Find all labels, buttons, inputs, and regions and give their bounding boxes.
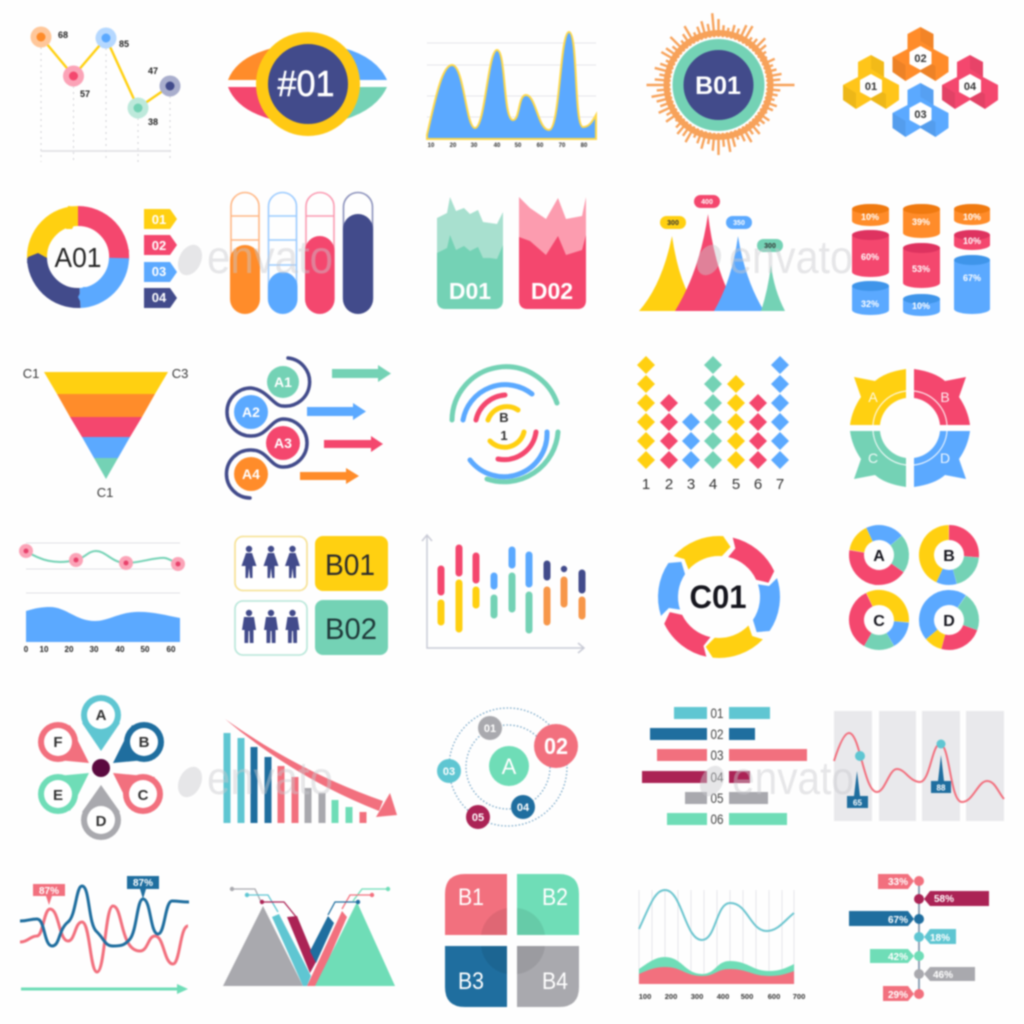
panel: area chart with peaks: 30 (471, 143, 478, 149)
panel: percentage tag timeline: 33% (888, 877, 908, 888)
panel: sunburst badge B01 (646, 13, 794, 155)
panel: peak chart: 400 (701, 199, 713, 206)
panel: six pin flower: E (53, 787, 63, 804)
panel: four tiles B1-B4: B4 (542, 968, 568, 995)
panel: area card D02: D02 (531, 278, 573, 304)
panel: four donuts A B C D: C (873, 613, 885, 630)
panel: butterfly bars 01-06: 02 (710, 726, 724, 742)
panel: line chart with dots: 38 (148, 117, 158, 127)
panel: funnel: C1 (23, 366, 39, 381)
panel: hexagon clusters 01-04: 04 (964, 81, 977, 93)
panel: line and stacked area chart: 100 (639, 992, 651, 1001)
panel: butterfly bars 01-06: 05 (710, 790, 724, 806)
panel: donut A01 with tags: 03 (152, 264, 166, 279)
panel: four part ring A B C D (850, 369, 970, 487)
panel: A1-A4 snake steps with arrows: A1 (274, 374, 292, 390)
panel: diamond column chart: 4 (709, 476, 717, 493)
panel: hexagon clusters 01-04: 01 (865, 81, 877, 93)
panel: area chart with peaks: 40 (494, 143, 501, 149)
panel: two line wave chart (20, 876, 189, 994)
panel: area card D02 (519, 197, 586, 309)
panel: percentage tag timeline: 42% (888, 952, 908, 963)
panel: butterfly bars 01-06: 04 (710, 769, 724, 785)
panel: curve over grey columns: 88 (937, 784, 946, 792)
watermark: envato row 5 left: envato (207, 752, 333, 804)
panel: cylinder stacks (852, 204, 990, 316)
panel: wave and area chart: 50 (141, 645, 150, 654)
panel: wave and area chart: 60 (167, 645, 176, 654)
panel: area chart with peaks: 70 (559, 143, 566, 149)
panel: overlapping mountains V (223, 887, 395, 986)
panel: area card D01 (437, 197, 503, 309)
panel: four donuts A B C D: D (943, 613, 955, 630)
panel: peak chart: 350 (733, 220, 745, 227)
panel: wave and area chart: 40 (116, 645, 125, 654)
panel: two line wave chart: 87% (133, 878, 153, 889)
panel: falling bars with arrow (224, 719, 397, 823)
panel: four donuts A B C D (847, 523, 981, 652)
panel: wave and area chart: 0 (24, 645, 29, 654)
panel: four part ring A B C D: A (868, 389, 878, 405)
panel: orbit diagram A: 02 (544, 733, 568, 759)
panel: six pin flower (38, 695, 164, 840)
panel: range bar chart (422, 535, 584, 653)
panel: people boxes B01 B02 (235, 536, 388, 655)
panel: four tiles B1-B4 (445, 874, 579, 1007)
panel: line chart with dots: 57 (80, 89, 90, 99)
panel: peak chart: 300 (667, 220, 679, 227)
panel: six pin flower: A (96, 707, 107, 724)
panel: line chart with dots: 68 (58, 30, 68, 40)
panel: donut A01 with tags: 02 (152, 238, 166, 253)
panel: four donuts A B C D: B (943, 548, 955, 565)
panel: diamond column chart: 3 (687, 476, 695, 493)
panel: area chart with peaks (427, 32, 596, 149)
panel: cylinder stacks: 10% (861, 212, 879, 222)
panel: donut A01 with tags: 01 (152, 212, 166, 227)
panel: six pin flower: F (53, 734, 63, 751)
panel: A1-A4 snake steps with arrows (226, 358, 391, 498)
panel: circular arrows C01: C01 (690, 579, 746, 615)
panel: concentric arcs B1: B (499, 410, 509, 425)
panel: donut A01 with tags: A01 (54, 242, 102, 273)
panel: four tiles B1-B4: B2 (542, 884, 568, 911)
panel: wave and area chart: 20 (65, 645, 74, 654)
panel: orbit diagram A: A (502, 754, 517, 779)
panel: area chart with peaks: 80 (581, 143, 588, 149)
panel: circular arrows C01 (646, 521, 792, 674)
panel: peak chart: 300 (764, 243, 776, 250)
panel: percentage tag timeline: 58% (934, 894, 954, 905)
panel: orbit diagram A: 01 (484, 723, 496, 735)
panel: line and stacked area chart: 600 (768, 992, 780, 1001)
panel: six pin flower: D (96, 813, 107, 830)
panel: butterfly bars 01-06: 01 (710, 705, 724, 721)
panel: cylinder stacks: 10% (912, 301, 930, 311)
panel: cylinder stacks: 10% (963, 236, 981, 246)
panel: six pin flower: B (139, 734, 150, 751)
panel: percentage tag timeline: 18% (930, 933, 950, 944)
panel: A1-A4 snake steps with arrows: A3 (274, 435, 292, 451)
panel: funnel: C3 (172, 366, 188, 381)
panel: line and stacked area chart: 200 (665, 992, 677, 1001)
panel: orbit diagram A: 04 (517, 802, 530, 814)
panel: percentage tag timeline: 67% (888, 915, 908, 926)
watermark: envato row 2 left: envato (207, 231, 333, 283)
panel: concentric arcs B1: 1 (500, 428, 508, 443)
panel: people boxes B01 B02: B01 (325, 549, 375, 582)
panel: diamond column chart (637, 356, 789, 493)
panel: butterfly bars 01-06 (642, 705, 807, 827)
panel: peak chart (639, 195, 785, 311)
panel: four part ring A B C D: C (868, 450, 878, 466)
panel: line and stacked area chart: 700 (793, 992, 805, 1001)
panel: donut A01 with tags (27, 206, 177, 308)
panel: line and stacked area chart: 400 (717, 992, 729, 1001)
panel: cylinder stacks: 53% (912, 264, 930, 274)
panel: donut A01 with tags: 04 (152, 290, 167, 305)
panel: eye badge #01 (228, 38, 387, 130)
panel: A1-A4 snake steps with arrows: A2 (242, 404, 260, 420)
panel: line chart with dots: 47 (148, 66, 158, 76)
panel: curve over grey columns (834, 711, 1004, 821)
panel: funnel (23, 366, 188, 500)
panel: wave and area chart: 10 (40, 645, 49, 654)
panel: area chart with peaks: 20 (450, 143, 457, 149)
panel: area chart with peaks: 60 (537, 143, 544, 149)
watermark: envato row 5 right: envato (732, 752, 854, 804)
panel: hexagon clusters 01-04 (843, 27, 998, 137)
panel: A1-A4 snake steps with arrows: A4 (242, 466, 260, 482)
panel: line chart with dots (30, 26, 180, 162)
panel: four part ring A B C D: D (940, 450, 950, 466)
panel: hexagon clusters 01-04: 02 (914, 53, 927, 65)
panel: percentage tag timeline (849, 874, 989, 1001)
panel: diamond column chart: 5 (732, 476, 740, 493)
panel: butterfly bars 01-06: 03 (710, 747, 724, 763)
panel: wave and area chart: 30 (90, 645, 99, 654)
panel: cylinder stacks: 67% (963, 273, 981, 283)
panel: diamond column chart: 6 (754, 476, 762, 493)
panel: four part ring A B C D: B (940, 389, 950, 405)
panel: funnel: C1 (97, 485, 113, 500)
panel: four donuts A B C D: A (873, 548, 885, 565)
panel: orbit diagram A: 05 (472, 812, 484, 824)
panel: area chart with peaks: 50 (515, 143, 522, 149)
panel: diamond column chart: 1 (642, 476, 650, 493)
panel: percentage tag timeline: 29% (888, 990, 908, 1001)
panel: four tiles B1-B4: B3 (458, 968, 484, 995)
panel: six pin flower: C (138, 787, 149, 804)
panel: two line wave chart: 87% (39, 886, 59, 897)
panel: people boxes B01 B02: B02 (325, 613, 377, 646)
panel: area chart with peaks: 10 (428, 143, 435, 149)
panel: sunburst badge B01: B01 (695, 72, 741, 100)
panel: area card D01: D01 (449, 278, 491, 304)
panel: curve over grey columns: 65 (853, 798, 862, 808)
panel: cylinder stacks: 32% (861, 299, 879, 309)
panel: butterfly bars 01-06: 06 (710, 811, 724, 827)
panel: diamond column chart: 7 (776, 476, 784, 493)
panel: concentric arcs B1 (452, 367, 558, 482)
panel: percentage tag timeline: 46% (933, 970, 953, 981)
panel: cylinder stacks: 39% (912, 217, 930, 227)
watermark: envato row 5 right (695, 752, 854, 804)
panel: line and stacked area chart: 500 (741, 992, 753, 1001)
panel: tube gauges (230, 192, 373, 314)
panel: cylinder stacks: 10% (963, 212, 981, 222)
panel: line chart with dots: 85 (119, 39, 129, 49)
panel: cylinder stacks: 60% (861, 252, 879, 262)
panel: line and stacked area chart (639, 890, 805, 1001)
panel: wave and area chart (19, 543, 185, 654)
panel: orbit diagram A (437, 708, 578, 829)
panel: orbit diagram A: 03 (443, 766, 455, 778)
panel: eye badge #01: #01 (278, 63, 334, 104)
watermark: envato row 2 right: envato (729, 231, 853, 283)
panel: four tiles B1-B4: B1 (458, 884, 484, 911)
panel: hexagon clusters 01-04: 03 (914, 109, 927, 121)
panel: diamond column chart: 2 (665, 476, 673, 493)
panel: line and stacked area chart: 300 (691, 992, 703, 1001)
